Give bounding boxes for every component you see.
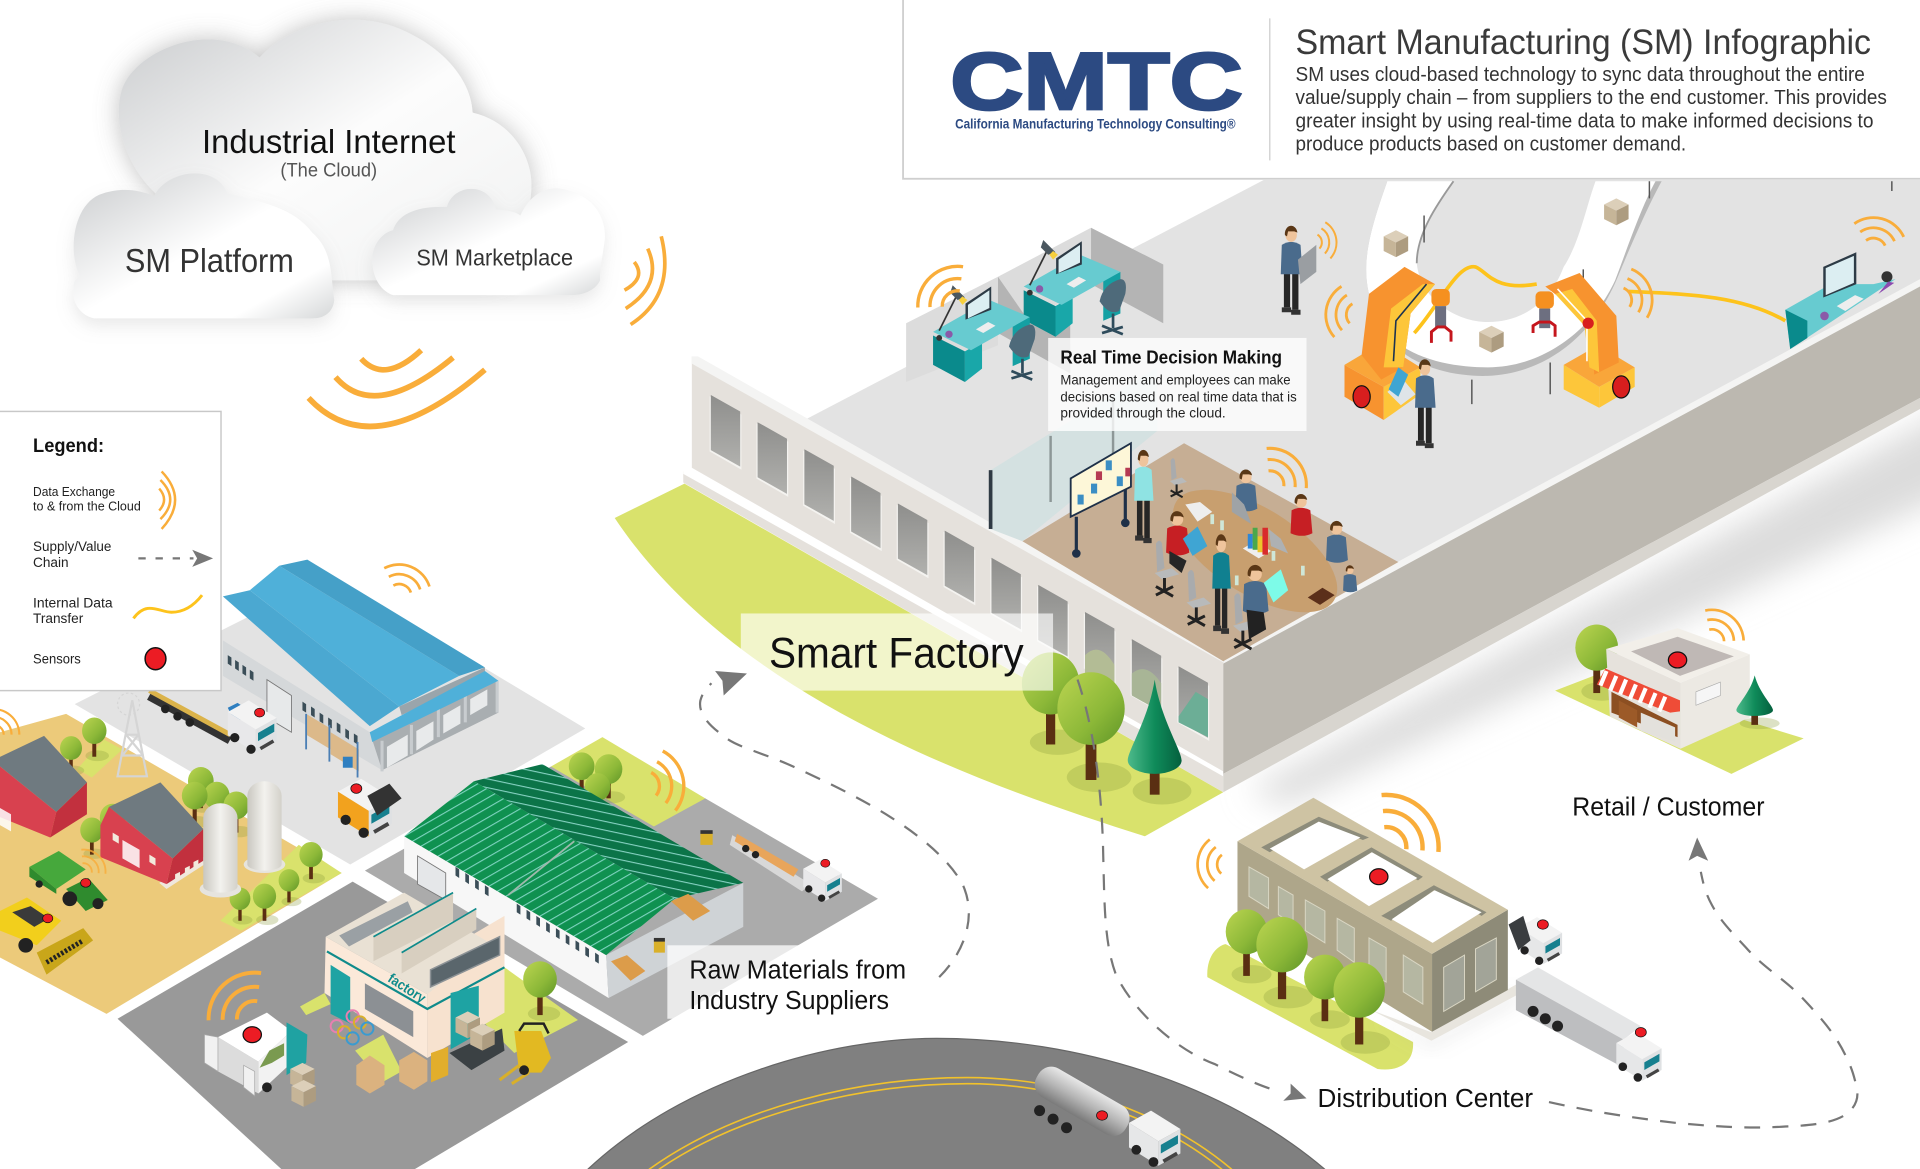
tanker truck [1029, 1061, 1180, 1167]
description: SM uses cloud-based technology to sync data throughout the entire [1296, 64, 1865, 86]
green roof [404, 764, 743, 955]
small factory building [324, 893, 504, 1082]
panel: smart factory building [615, 180, 1920, 836]
icon: retail signal [1697, 602, 1751, 650]
icon: cubicle data signal [908, 256, 974, 319]
roof [1237, 798, 1508, 954]
conveyor and boxes [449, 1011, 504, 1070]
callout body [1060, 372, 1297, 421]
small forklift inside [654, 938, 665, 953]
green tractor [29, 851, 108, 911]
sensor [1668, 652, 1687, 668]
person: man right [1326, 521, 1348, 563]
factory lawn [615, 484, 1223, 836]
red barn front [100, 782, 208, 889]
small forklift outside [700, 830, 713, 845]
icon: green warehouse signal [647, 748, 689, 814]
panel: conveyor belt [1366, 181, 1892, 404]
icon: barn signal [75, 844, 111, 880]
callout body: Management and employees can make [1060, 372, 1291, 387]
windmill [118, 693, 147, 776]
panel: farm [0, 693, 342, 1014]
panel: legend [0, 411, 221, 691]
delivery truck [204, 1013, 316, 1107]
panel: distribution center [1207, 798, 1662, 1082]
wall unit [1696, 682, 1720, 705]
trees [1226, 909, 1390, 1054]
legend: sensors: Sensors [33, 652, 81, 667]
person: man seated [1243, 565, 1269, 639]
icon: data exchange below clouds [309, 350, 485, 426]
lot ground [365, 767, 878, 1036]
box truck [1516, 967, 1662, 1082]
person: woman red [1291, 494, 1312, 536]
person: woman seated [1166, 511, 1189, 573]
label: SM Platform: SM Platform [125, 243, 294, 280]
legend: internal data: Transfer [33, 611, 84, 626]
forklift [500, 1024, 551, 1084]
internal data wire [1414, 267, 1785, 333]
robot arm right [1533, 273, 1635, 408]
lawn patch [551, 737, 705, 827]
icon: person data signal [1316, 221, 1339, 260]
panel: factory lot [118, 882, 628, 1169]
road lines [649, 1078, 1232, 1169]
trees behind barn [100, 767, 252, 850]
lawn [1207, 944, 1413, 1069]
store building [1606, 649, 1680, 749]
legend: sensors [33, 648, 166, 670]
label: Smart Factory: Smart Factory [769, 629, 1024, 677]
person with tablet [1281, 226, 1316, 315]
panel: retail store [1555, 624, 1804, 774]
legend: supply chain [33, 539, 213, 570]
person: woman standing [1212, 534, 1231, 634]
pallets [356, 1052, 427, 1093]
callout body: decisions based on real time data that is [1060, 390, 1297, 405]
skylights [1261, 817, 1487, 943]
icon: data exchange from Marketplace [624, 236, 665, 324]
awning [1597, 669, 1680, 713]
box on conveyor [1479, 326, 1504, 353]
road surface [588, 1038, 1325, 1169]
wall shadow [1249, 404, 1920, 806]
description: value/supply chain – from suppliers to the end customer. This provides [1296, 87, 1887, 109]
legend: internal data [33, 595, 202, 626]
person: man back [1235, 470, 1257, 511]
glass partition [991, 367, 1157, 541]
person: man edge [1343, 565, 1357, 592]
seated chairs [1155, 541, 1258, 649]
sensor [1370, 869, 1388, 885]
tree: factory round front [1057, 672, 1131, 792]
desk upper [1024, 240, 1126, 337]
base [1371, 983, 1518, 1041]
icon: control desk signal [1851, 212, 1907, 250]
laptops and items [1183, 492, 1335, 605]
arrow: smart factory to distribution center [1078, 680, 1307, 1101]
presenter [1134, 450, 1153, 543]
lawn [1555, 675, 1804, 774]
desk lower [933, 285, 1035, 382]
logo: CMTC: CMTC [950, 37, 1243, 127]
arrow: distribution center to retail [1549, 838, 1857, 1127]
arrow: raw materials to smart factory [700, 671, 969, 977]
person at laptop [1387, 359, 1436, 448]
label: Distribution Center: Distribution Center [1318, 1085, 1534, 1113]
description [1296, 64, 1887, 156]
callout: Raw Materials [667, 945, 918, 1019]
panel: road with tanker [588, 1038, 1325, 1169]
truck cab [1509, 916, 1562, 965]
icon: meeting room signal [1256, 439, 1315, 498]
walls [1237, 841, 1432, 1032]
presentation board [1071, 443, 1131, 558]
label: SM Marketplace: SM Marketplace [416, 245, 573, 271]
tree: factory conifer [1128, 680, 1191, 804]
callout: Real Time Decision Making [1048, 338, 1307, 431]
panel: header [903, 0, 1920, 179]
factory floor [807, 180, 1920, 661]
panel: meeting room [991, 367, 1398, 661]
legend: internal data: Internal Data [33, 595, 113, 610]
cloud: SM Marketplace [372, 188, 605, 295]
label: Raw Materials from Industry Suppliers: Raw Materials from [689, 956, 906, 984]
bicycles [331, 1010, 373, 1044]
robot arm left [1344, 267, 1451, 420]
tree scatter [60, 718, 325, 925]
farm ground [0, 714, 342, 1014]
icon: robot right signal [1619, 265, 1658, 322]
callout heading: Real Time Decision Making [1060, 347, 1282, 368]
description: produce products based on customer demand. [1296, 134, 1686, 156]
cloud: SM Platform [73, 173, 334, 318]
room floor [1022, 443, 1398, 661]
legend title: Legend: [33, 435, 104, 457]
silos [200, 781, 285, 898]
icon: warehouse signal [380, 558, 434, 598]
legend: data exchange: Data Exchange [33, 484, 115, 499]
warehouse walls [223, 640, 382, 770]
callout: Smart Factory [741, 613, 1053, 691]
red barn rear [0, 736, 87, 838]
flatbed truck [149, 691, 277, 754]
warehouse walls [404, 836, 609, 998]
tree by factory [523, 961, 560, 1021]
icon: distribution right signal [1367, 782, 1452, 867]
subheading: The Cloud: (The Cloud) [280, 159, 377, 181]
yard ground [75, 576, 585, 864]
panel: green warehouse lot [365, 737, 878, 1036]
farm lawn patch [77, 740, 342, 931]
legend: supply chain: Chain [33, 555, 69, 570]
heading: Industrial Internet: Industrial Internet [202, 124, 456, 161]
table [1153, 465, 1357, 637]
box on conveyor [1604, 198, 1629, 225]
label: Retail / Customer: Retail / Customer [1572, 793, 1765, 821]
legend: data exchange [33, 471, 175, 529]
door and window [1611, 692, 1678, 742]
label: Raw Materials from Industry Suppliers: Industry Suppliers [689, 987, 889, 1015]
lot ground [118, 882, 628, 1169]
trees behind warehouse [569, 752, 625, 819]
tree [1575, 624, 1622, 701]
right wall [1223, 279, 1920, 792]
empty chair [1170, 458, 1187, 497]
logo: CMTC: California Manufacturing Technology Consulting® [955, 116, 1236, 132]
yellow truck cab [338, 779, 402, 838]
left wall with windows [683, 356, 1223, 792]
callout body: provided through the cloud. [1060, 406, 1226, 421]
legend: data exchange: to & from the Cloud [33, 499, 141, 514]
label: Raw Materials from Industry Suppliers [689, 956, 906, 1015]
windows [1249, 867, 1496, 1011]
cloud: Industrial Internet [119, 20, 531, 280]
box on conveyor [1384, 230, 1408, 257]
tree: factory round back [1022, 652, 1085, 755]
icon: robot left signal [1323, 285, 1355, 339]
lumber pile inside [611, 894, 710, 981]
bar chart model [1243, 528, 1271, 558]
legend: supply chain: Supply/Value [33, 539, 111, 554]
panel: yard with blue warehouse [75, 560, 585, 864]
conifer [1736, 675, 1780, 729]
pallet rack [306, 714, 359, 778]
factory sign: factory [385, 970, 429, 1006]
icon: distribution left signal [1197, 839, 1222, 889]
factory lawn patch [300, 967, 578, 1082]
control desk with operator [1785, 252, 1896, 349]
icon: farm signal left [0, 703, 25, 742]
cubicle partitions [906, 228, 1163, 382]
panel: cubicle offices [906, 228, 1163, 382]
description: greater insight by using real-time data to make informed decisions to [1296, 110, 1873, 132]
icon: factory lot signal [198, 961, 273, 1034]
title: Smart Manufacturing (SM) Infographic [1296, 22, 1871, 62]
flatbed lumber truck [730, 834, 842, 902]
blue roof [223, 560, 498, 742]
yellow harvester [0, 898, 93, 975]
